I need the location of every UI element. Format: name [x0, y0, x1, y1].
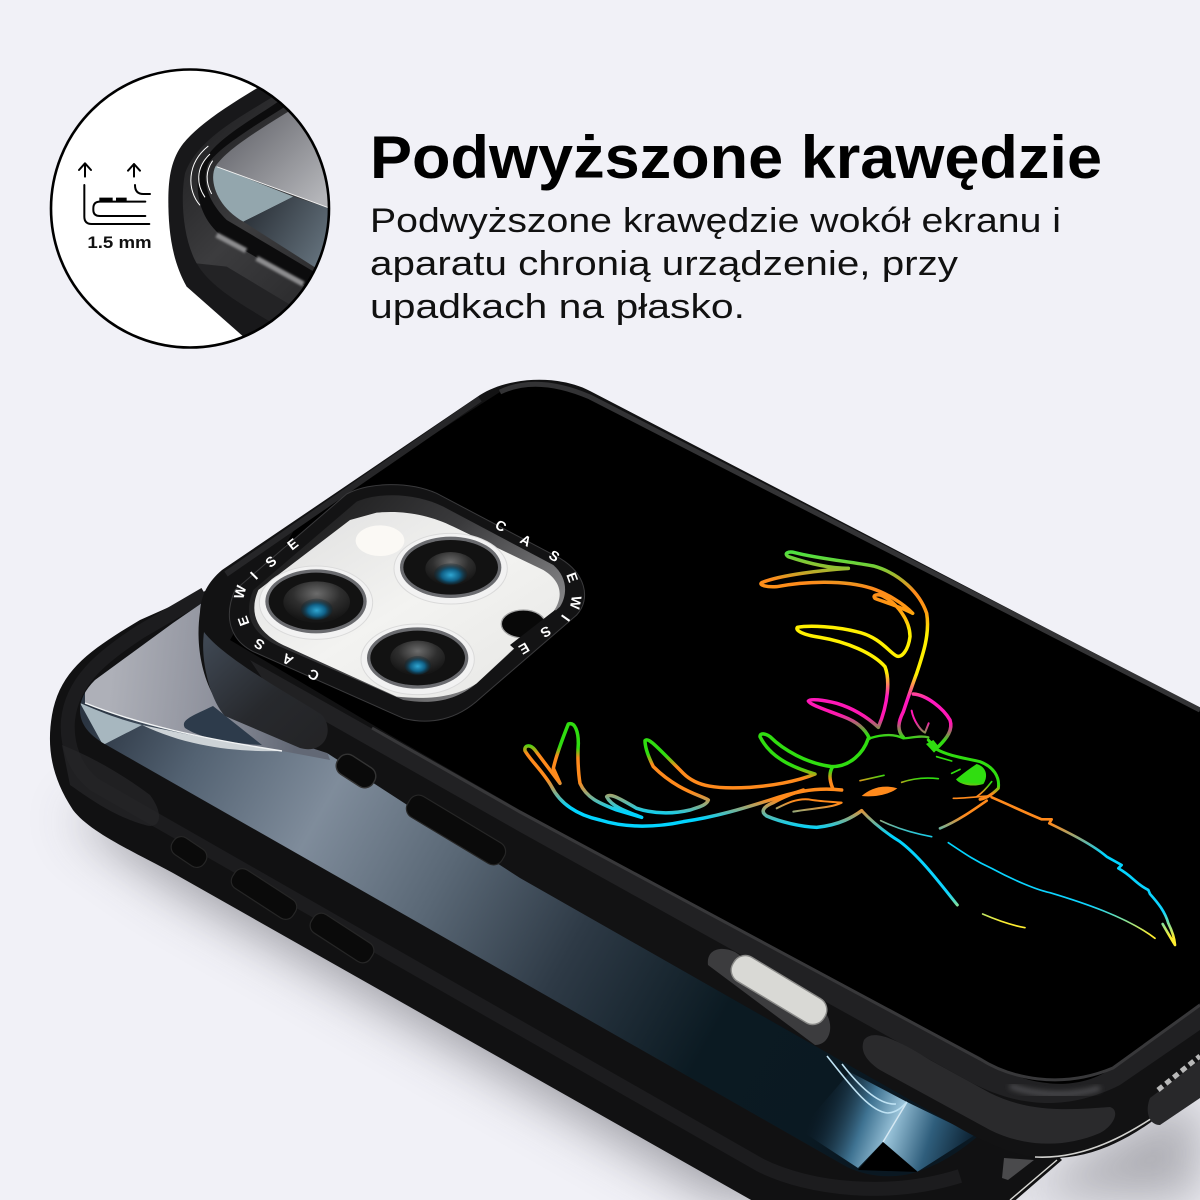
- zoomed corner and lip icon: [79, 88, 340, 337]
- casewise lettering: E: [234, 614, 252, 628]
- lens 3: [361, 624, 474, 695]
- speaker grille patch: [1148, 1060, 1200, 1125]
- lens 2: [394, 533, 507, 604]
- left antler: [525, 724, 868, 826]
- black phone face: [230, 384, 1200, 1084]
- wallpaper white curve: [85, 703, 282, 751]
- inner ear: [912, 711, 929, 733]
- casewise lettering: S: [251, 635, 267, 654]
- front volume button: [403, 791, 509, 869]
- black triangle wallpaper: [858, 1142, 918, 1172]
- lower phone port: [1002, 1158, 1034, 1180]
- lower phone bumper highlight: [68, 594, 960, 1189]
- casewise lettering: E: [563, 570, 581, 584]
- speaker holes: [1158, 1056, 1200, 1090]
- wallpaper pale sliver: [142, 725, 282, 751]
- neck lower line: [948, 843, 1155, 938]
- casewise lettering: C: [492, 516, 509, 535]
- chin: [940, 801, 987, 828]
- face lower rim: [372, 728, 1200, 1080]
- top-left rim: [226, 399, 480, 574]
- deer artwork: [525, 552, 1175, 945]
- left ear outline: [763, 790, 862, 827]
- head top line: [869, 735, 928, 738]
- right antler outer: [786, 552, 928, 737]
- casewise lettering: E: [284, 535, 301, 553]
- description text: aparatu chronią urządzenie, przy: [370, 245, 958, 283]
- left translucent patch: [203, 632, 328, 749]
- blue light region right: [883, 1102, 975, 1172]
- left ear inner: [777, 799, 842, 812]
- port bezel: [708, 949, 830, 1045]
- flash: [356, 525, 404, 556]
- ring inner wall: [249, 495, 565, 702]
- band ridge highlight: [1010, 1086, 1100, 1094]
- casewise lettering: A: [279, 650, 296, 669]
- nostril detail: [937, 757, 992, 797]
- chest tick: [983, 914, 1025, 928]
- blue light region left: [814, 1072, 907, 1168]
- casewise lettering: E: [516, 639, 532, 658]
- lower phone corner patch: [62, 745, 159, 826]
- casewise lettering: S: [262, 552, 280, 571]
- lower phone volume up: [228, 865, 300, 923]
- diagram bumps: [99, 198, 127, 202]
- curved blue light lines: [827, 1056, 907, 1113]
- nose fill: [956, 764, 986, 786]
- casewise lettering: I: [558, 612, 573, 624]
- front phone silver bottom rim: [1035, 1084, 1200, 1157]
- lower phone: case and screen: [50, 560, 1062, 1200]
- lower phone volume down: [307, 910, 377, 966]
- circle outline: [51, 70, 329, 348]
- lidar sensor: [501, 610, 545, 638]
- camera module: [229, 485, 585, 721]
- casewise lettering: W: [230, 583, 249, 600]
- brow lines: [860, 775, 938, 782]
- wallpaper dark blob: [184, 706, 262, 745]
- casewise lettering: A: [517, 531, 534, 550]
- wallpaper pale wedge: [80, 703, 142, 745]
- description text: Podwyższone krawędzie wokół ekranu i: [370, 202, 1061, 240]
- title: Podwyższone krawędzie: [370, 124, 1102, 191]
- front corner translucent patch: [863, 1035, 1115, 1144]
- measurement label: 1.5 mm: [87, 233, 152, 252]
- right ear: [913, 694, 951, 747]
- throat line: [881, 821, 932, 837]
- front mute switch: [332, 750, 380, 792]
- nose ridge: [928, 740, 999, 799]
- casewise lettering: W: [567, 595, 585, 611]
- right antler inner tines: [761, 568, 913, 738]
- casewise lettering: [230, 516, 585, 684]
- front phone case body: [199, 380, 1200, 1158]
- front neck line: [862, 811, 957, 905]
- face edge rim: [500, 384, 1200, 710]
- raised edge diagram: [79, 163, 150, 224]
- screen wallpaper light top: [85, 604, 330, 760]
- mouth: [953, 796, 990, 798]
- eye: [862, 787, 897, 796]
- antler stem: [830, 767, 833, 788]
- casewise lettering: S: [538, 623, 554, 641]
- casewise lettering: I: [247, 568, 261, 582]
- lower phone screen: [80, 604, 976, 1176]
- charging port silver: [726, 951, 832, 1029]
- casewise lettering: S: [546, 547, 563, 565]
- description text: upadkach na płasko.: [370, 288, 745, 326]
- lower phone bottom edge silver: [1010, 1160, 1057, 1200]
- lens 1: [259, 566, 373, 639]
- zoomed phone corner: [168, 88, 340, 337]
- description text: [370, 202, 1061, 326]
- drop shadow under phones: [70, 800, 1200, 1200]
- lower phone mute switch: [168, 833, 210, 871]
- front phone band: [250, 660, 1200, 1103]
- circle base: [51, 70, 329, 348]
- white camera window: [254, 512, 560, 698]
- white pressure arcs: [191, 146, 213, 205]
- casewise lettering: C: [305, 666, 322, 684]
- camera ring: [229, 485, 585, 721]
- front phone: [199, 380, 1200, 1158]
- detail circle: raised edge: [51, 70, 340, 348]
- brow joint: [926, 740, 939, 753]
- neck upper line with jagged fur: [992, 797, 1175, 945]
- light ray: [883, 1102, 907, 1142]
- lower phone bumper: [50, 588, 1062, 1200]
- ring overlap over lidar: [510, 610, 568, 657]
